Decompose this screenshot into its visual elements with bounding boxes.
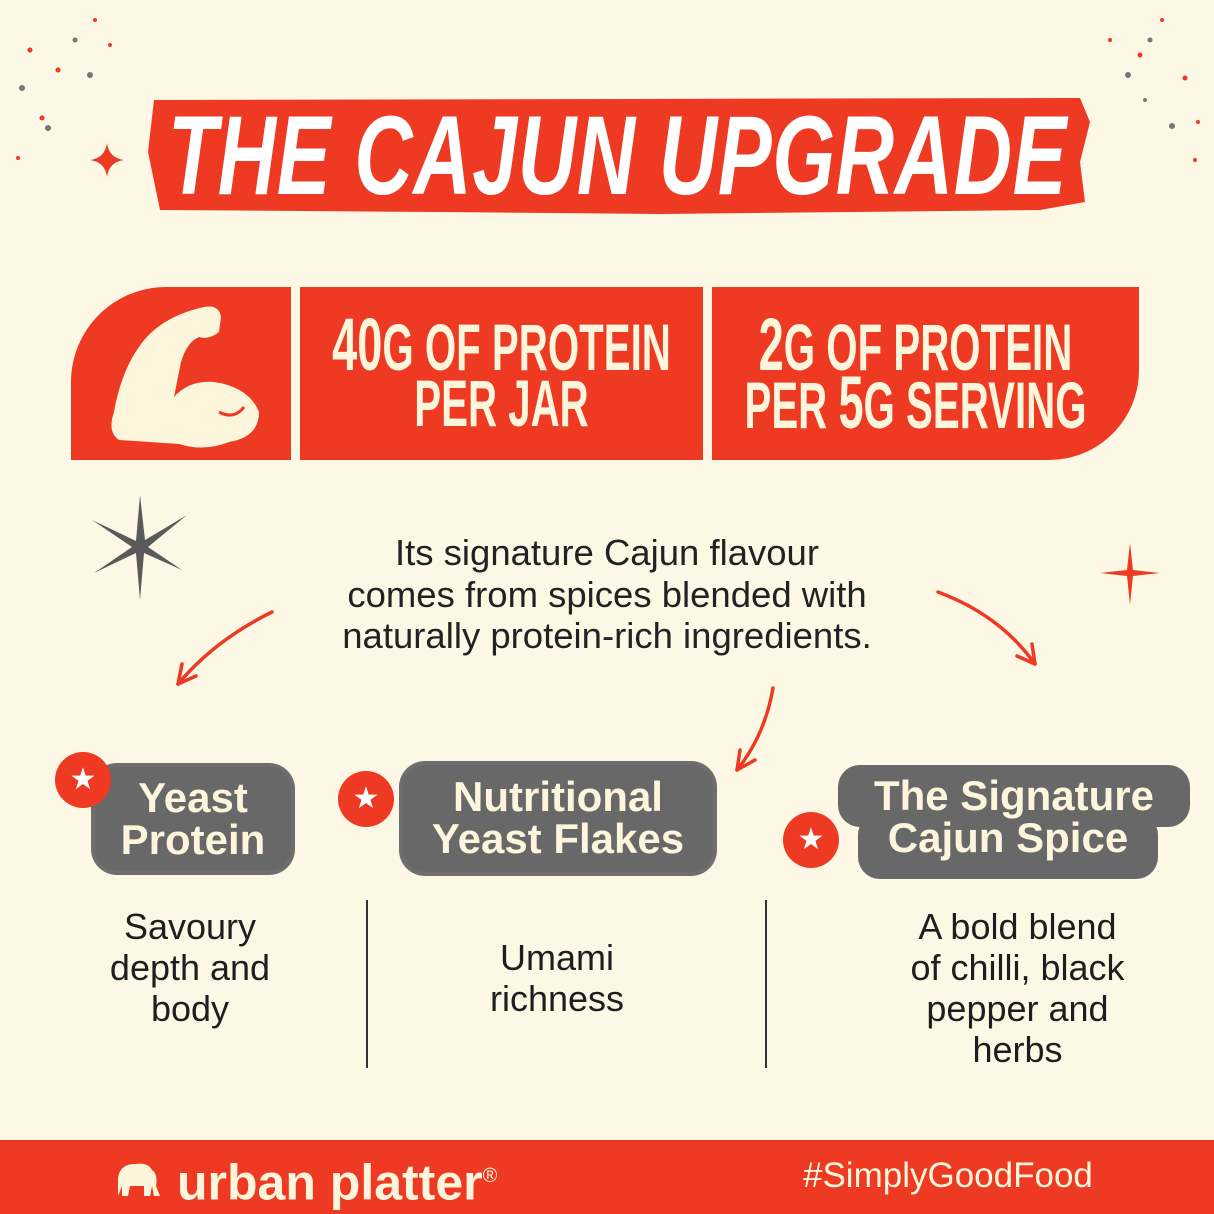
item 3: signature cajun spice (783, 765, 1190, 879)
heading (403, 765, 713, 872)
item 2: nutritional yeast flakes (338, 761, 717, 876)
text: savoury: Savoury (124, 906, 256, 947)
hashtag: #SimplyGoodFood (803, 1156, 1093, 1195)
text: umami (490, 937, 624, 1019)
footer (0, 1140, 1214, 1214)
intro text: naturally protein-rich ingredients. (342, 615, 872, 656)
item 1: yeast protein (55, 752, 295, 875)
text: umami: richness (490, 978, 624, 1019)
icon: red sparkle (1100, 543, 1160, 605)
text: savoury: depth and (110, 947, 270, 988)
heading: Cajun Spice (888, 814, 1128, 861)
heading: Protein (121, 816, 265, 863)
icon: star (55, 752, 111, 808)
text: bold blend (910, 906, 1125, 1070)
heading: The Signature (874, 772, 1154, 819)
text: bold blend: herbs (972, 1029, 1063, 1070)
icon: star: ★ (353, 782, 379, 815)
stat: 2g per 5g: 2G OF PROTEIN (759, 303, 1072, 386)
icon: star: ★ (70, 763, 96, 796)
heading (95, 767, 291, 871)
intro text: Its signature Cajun flavour (395, 532, 819, 573)
icon: star (338, 771, 394, 827)
icon: elephant (118, 1164, 160, 1196)
heading: Nutritional (453, 773, 663, 820)
text: bold blend: of chilli, black (910, 947, 1125, 988)
arrow left (178, 612, 272, 684)
intro text (342, 532, 872, 656)
protein banner (71, 287, 1139, 460)
text: savoury: body (151, 988, 229, 1029)
stat: 40g per jar: PER JAR (414, 366, 589, 440)
stat: 40g per jar (300, 287, 703, 460)
text: bold blend: A bold blend (918, 906, 1117, 947)
stat: 2g per 5g (712, 287, 1139, 460)
arrows (176, 590, 1037, 772)
title: THE CAJUN UPGRADE (168, 93, 1067, 218)
intro text: comes from spices blended with (347, 574, 867, 614)
decorative dots (16, 18, 1200, 162)
stat: 40g per jar: 40G OF PROTEIN (332, 303, 671, 386)
icon: sparkle red title (90, 143, 124, 177)
dividers (366, 900, 368, 1068)
arrow right (938, 592, 1035, 664)
logo text: urban platter® (177, 1155, 497, 1211)
icon: star (783, 812, 839, 868)
heading: Yeast (138, 774, 248, 821)
text: umami: Umami (500, 937, 614, 978)
heading (838, 765, 1190, 879)
text: savoury (110, 906, 270, 1029)
text: bold blend: pepper and (926, 988, 1109, 1029)
stat: 2g per 5g: PER 5G SERVING (744, 361, 1087, 444)
icon: muscle arm (71, 287, 291, 460)
heading: Yeast Flakes (432, 815, 684, 862)
arrow middle (737, 688, 773, 770)
icon: gray sparkle (92, 495, 187, 600)
icon: star: ★ (798, 823, 824, 856)
